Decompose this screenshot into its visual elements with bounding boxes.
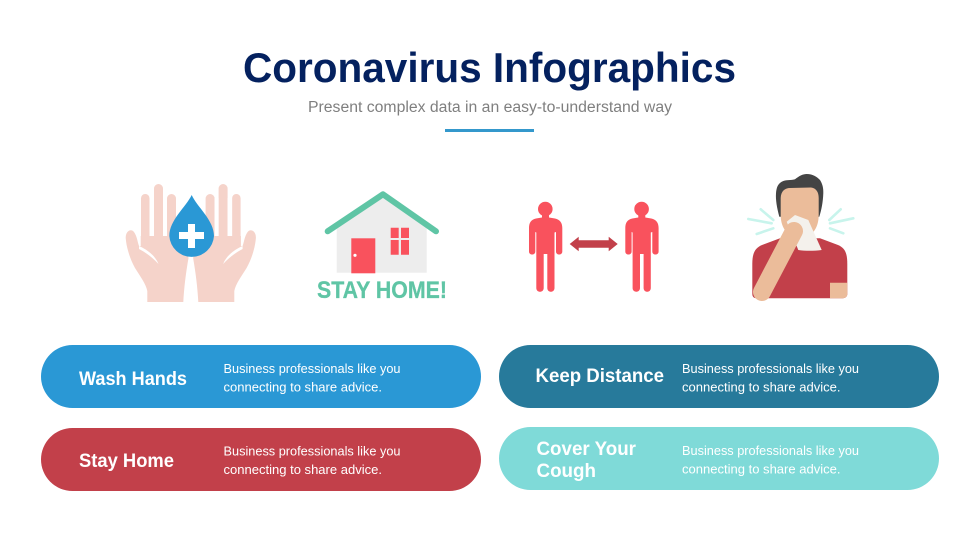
left hand xyxy=(126,184,188,302)
plus sign xyxy=(179,224,204,248)
description: connecting to share advice. xyxy=(224,380,382,394)
cough rays xyxy=(748,209,853,234)
icon: stay home house xyxy=(317,194,447,304)
title underline xyxy=(445,129,534,132)
right person xyxy=(625,202,659,292)
house body xyxy=(337,196,427,273)
title: Coronavirus Infographics xyxy=(243,44,736,91)
icon: hands with water drop xyxy=(126,184,256,302)
description: Business professionals like you xyxy=(682,361,859,376)
description: connecting to share advice. xyxy=(224,462,382,477)
heading: Keep Distance xyxy=(536,366,664,387)
description: Business professionals like you xyxy=(224,361,400,376)
heading: Stay Home xyxy=(79,451,174,472)
right hand xyxy=(193,184,256,302)
hair xyxy=(776,174,823,217)
description: connecting to share advice. xyxy=(682,380,840,394)
double arrow xyxy=(570,237,618,251)
water drop xyxy=(169,195,214,257)
arm xyxy=(762,231,794,292)
face xyxy=(781,188,819,238)
panel: stay home xyxy=(41,428,481,491)
panel: cover your cough xyxy=(499,427,939,490)
description: Business professionals like you xyxy=(224,444,400,458)
heading: Cover Your xyxy=(536,439,637,460)
subtitle: Present complex data in an easy-to-understand way xyxy=(308,99,672,116)
heading: Cough xyxy=(536,461,596,482)
description: connecting to share advice. xyxy=(682,462,840,476)
window xyxy=(391,228,409,255)
shirt xyxy=(752,238,847,298)
panel: wash hands xyxy=(41,345,481,408)
icon: keep distance xyxy=(529,202,659,292)
roof xyxy=(328,194,436,231)
heading: Wash Hands xyxy=(79,369,187,390)
description: Business professionals like you xyxy=(682,443,859,458)
stay home label: STAY HOME! xyxy=(317,277,447,304)
panel: keep distance xyxy=(499,345,939,408)
other hand xyxy=(830,283,847,298)
door xyxy=(351,238,375,273)
left person xyxy=(529,202,562,292)
icon: person covering cough xyxy=(748,174,853,298)
tissue xyxy=(787,215,822,251)
